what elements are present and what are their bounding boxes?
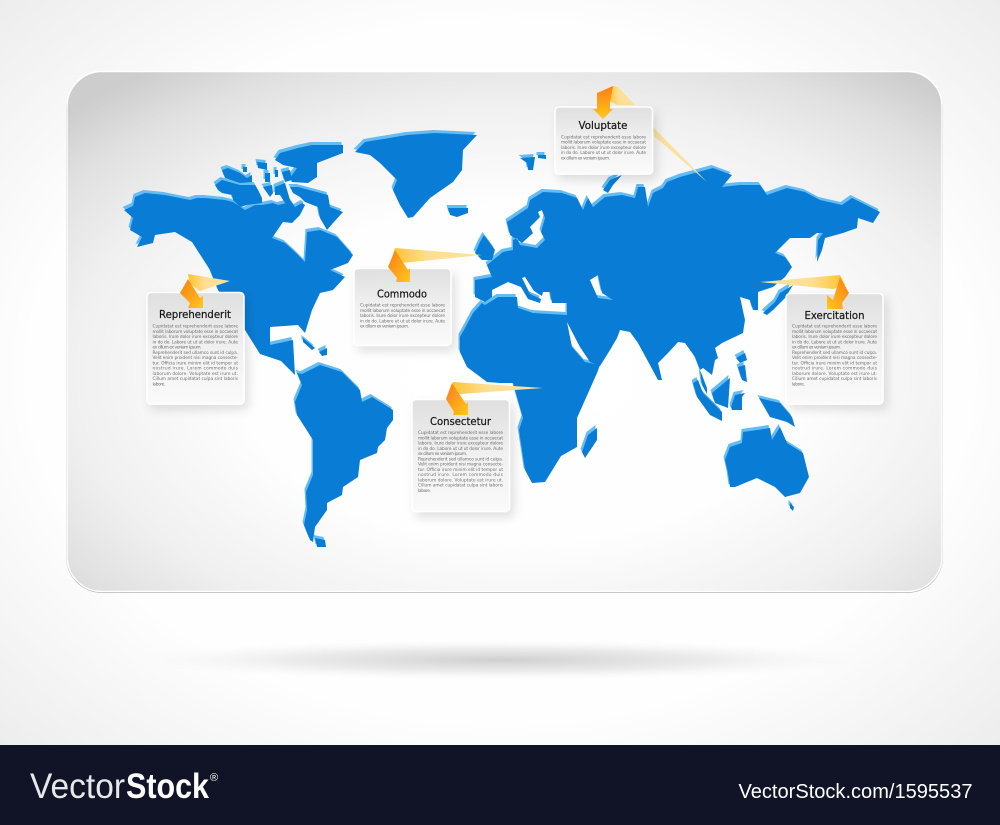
text block: Reprehenderit: tur. Officia irure minim elit id tempor ut xyxy=(152,360,238,366)
text block: Commodo: Cupidatat est reprehenderit esse labore xyxy=(360,302,445,308)
text block: Reprehenderit: ex cillum ex veniam ipsum. xyxy=(152,344,202,350)
text block: Voluptate: mollit laborum voluptate esse in occaecat xyxy=(561,140,646,146)
text block: Reprehenderit: Reprehenderit sed ullamco sunt id culpa. xyxy=(152,350,238,356)
footer logo: Vector xyxy=(30,767,125,806)
text block: Exercitation: Reprehenderit sed ullamco sunt id culpa. xyxy=(792,350,877,356)
text block: Consectetur: laboris. Irure dolor irure excepteur dolore xyxy=(418,440,503,446)
icon: orange arrow xyxy=(593,86,613,119)
text block: Commodo: mollit laborum voluptate esse in occaecat xyxy=(360,308,445,314)
footer id: VectorStock.com/1595537 xyxy=(738,781,972,803)
text block: Consectetur: nostrud irure. Lorem commodo duis xyxy=(418,472,504,478)
text block: Consectetur: Cupidatat est reprehenderit esse labore xyxy=(418,430,503,436)
callout: Exercitation xyxy=(760,275,883,404)
text block: Commodo: in do do. Labore ut ut ut dolor irure. Aute xyxy=(360,318,445,324)
text block: Exercitation: Velit enim proident nisi magna consecte- xyxy=(792,355,877,361)
text block: Exercitation: Cupidatat est reprehenderit esse labore xyxy=(792,324,877,330)
heading: Consectetur: Consectetur xyxy=(430,416,492,428)
heading: Commodo: Commodo xyxy=(377,288,427,300)
icon: orange arrow xyxy=(388,250,410,282)
footer bar xyxy=(0,745,1000,825)
text block: Voluptate: laboris. Irure dolor irure excepteur dolore xyxy=(561,145,646,151)
text block: Consectetur: in do do. Labore ut ut ut dolor irure. Aute xyxy=(418,446,503,452)
icon: orange arrow xyxy=(827,277,849,309)
text block: Voluptate: ex cillum ex veniam ipsum. xyxy=(561,155,610,161)
text block: Consectetur: Reprehenderit sed ullamco sunt id culpa. xyxy=(418,456,503,462)
text block: Commodo xyxy=(360,302,445,330)
icon: orange arrow xyxy=(180,279,203,308)
text block: Exercitation: ex cillum ex veniam ipsum. xyxy=(792,344,841,350)
text block: Commodo: ex cillum ex veniam ipsum. xyxy=(360,324,409,330)
text block: Consectetur: ex cillum ex veniam ipsum. xyxy=(418,451,467,457)
text block: Consectetur: tur. Officia irure minim elit id tempor ut xyxy=(418,467,503,473)
text block: Reprehenderit: laborum dolore. Voluptate est irure ut. xyxy=(152,371,238,377)
text block: Exercitation xyxy=(792,324,878,387)
text block: Exercitation: tur. Officia irure minim elit id tempor ut xyxy=(792,360,877,366)
text block: Reprehenderit xyxy=(152,324,239,387)
callout: Reprehenderit xyxy=(147,274,244,404)
world map xyxy=(122,130,880,547)
icon: orange arrow xyxy=(446,383,468,415)
text block: Consectetur: labore. xyxy=(418,488,431,494)
callout: Voluptate xyxy=(555,86,707,182)
registered mark: ® xyxy=(210,772,218,784)
text block: Reprehenderit: nostrud irure. Lorem commodo duis xyxy=(152,366,239,372)
text block: Reprehenderit: Cupidatat est reprehenderit esse labore xyxy=(152,324,238,330)
heading: Exercitation: Exercitation xyxy=(804,310,864,322)
text block: Reprehenderit: labore. xyxy=(152,381,166,387)
text block: Exercitation: nostrud irure. Lorem commodo duis xyxy=(792,366,878,372)
text block: Reprehenderit: mollit laborum voluptate esse in occaecat xyxy=(152,329,238,335)
panel: map board xyxy=(66,72,943,593)
text block: Consectetur: Cillum amet cupidatat culpa sint laboris xyxy=(418,482,504,488)
text block: Exercitation: mollit laborum voluptate esse in occaecat xyxy=(792,329,877,335)
floor shadow xyxy=(130,640,870,680)
text block: Exercitation: laboris. Irure dolor irure excepteur dolore xyxy=(792,334,877,340)
text block: Exercitation: laborum dolore. Voluptate est irure ut. xyxy=(792,371,877,377)
heading: Voluptate: Voluptate xyxy=(578,120,628,132)
text block: Reprehenderit: laboris. Irure dolor irure excepteur dolore xyxy=(152,334,238,340)
text block: Consectetur xyxy=(418,430,504,494)
text block: Voluptate xyxy=(561,134,646,161)
text block: Exercitation: in do do. Labore ut ut ut dolor irure. Aute xyxy=(792,339,877,345)
callout: Consectetur xyxy=(412,382,543,512)
footer logo: Stock xyxy=(126,767,209,806)
text block: Voluptate: Cupidatat est reprehenderit esse labore xyxy=(561,134,646,140)
text block: Exercitation: labore. xyxy=(792,381,805,387)
text block: Consectetur: mollit laborum voluptate esse in occaecat xyxy=(418,435,503,441)
text block: Consectetur: laborum dolore. Voluptate est irure ut. xyxy=(418,477,503,483)
text block: Reprehenderit: Velit enim proident nisi magna consecte- xyxy=(152,355,238,361)
text block: Exercitation: Cillum amet cupidatat culpa sint laboris xyxy=(792,376,878,382)
text block: Reprehenderit: in do do. Labore ut ut ut dolor irure. Aute xyxy=(152,339,238,345)
text block: Voluptate: in do do. Labore ut ut ut dolor irure. Aute xyxy=(561,150,646,156)
text block: Reprehenderit: Cillum amet cupidatat culpa sint laboris xyxy=(152,376,239,382)
callout: Commodo xyxy=(354,248,482,346)
text block: Consectetur: Velit enim proident nisi magna consecte- xyxy=(418,462,503,468)
text block: Commodo: laboris. Irure dolor irure excepteur dolore xyxy=(360,313,445,319)
heading: Reprehenderit: Reprehenderit xyxy=(159,309,231,321)
